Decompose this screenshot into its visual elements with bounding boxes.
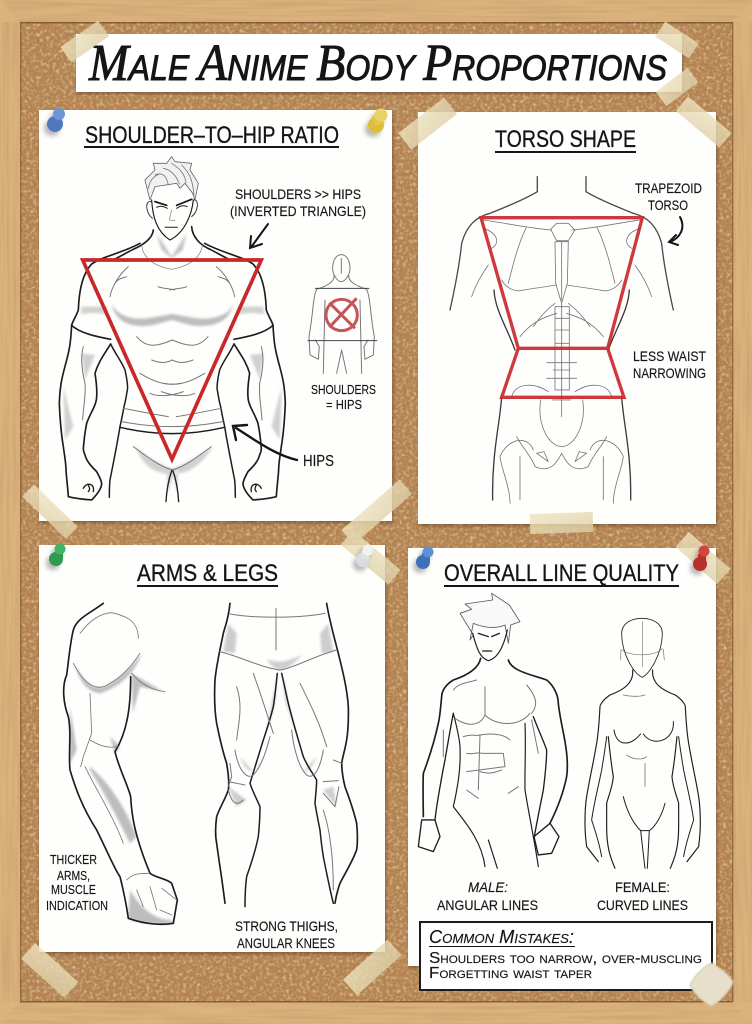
label: shoulders equal hips	[311, 382, 376, 412]
callout: common mistakes: Forgetting waist taper	[429, 965, 592, 982]
figure: small wrong proportion	[308, 255, 377, 373]
label: less waist narrowing: NARROWING	[633, 365, 706, 381]
heading: arms and legs: ARMS & LEGS	[137, 560, 278, 587]
arrow: to shoulders	[250, 224, 268, 248]
label: trapezoid torso: TRAPEZOID	[635, 180, 702, 196]
label: thicker arms: ARMS,	[57, 868, 90, 883]
label: hips: HIPS	[303, 453, 334, 470]
figure: muscular male torso	[59, 243, 285, 502]
callout: shoulders wider than hips	[230, 186, 366, 219]
red inverted triangle	[83, 260, 261, 459]
callout: common mistakes: Shoulders too narrow, over-muscling	[429, 950, 702, 967]
label: female curved lines: CURVED LINES	[597, 897, 688, 913]
label: female curved lines	[597, 879, 688, 913]
callout: shoulders wider than hips: (INVERTED TRIANGLE)	[230, 203, 366, 219]
label: male angular lines	[437, 879, 538, 913]
pin: blue	[47, 108, 65, 132]
label: shoulders equal hips: SHOULDERS	[311, 382, 376, 397]
pin: white	[356, 544, 374, 567]
icon: crossed circle	[326, 298, 357, 331]
callout: shoulders wider than hips: SHOULDERS >> HIPS	[235, 186, 361, 202]
figure: male angular	[418, 593, 567, 868]
label: strong thighs: ANGULAR KNEES	[237, 935, 335, 951]
panel: overall line quality	[408, 548, 716, 990]
panel: arms and legs	[39, 545, 385, 952]
label: male angular lines: MALE:	[468, 879, 508, 895]
heading: overall line quality: OVERALL LINE QUALITY	[444, 560, 679, 587]
label: less waist narrowing: LESS WAIST	[633, 348, 706, 364]
title: MALE ANIME BODY PROPORTIONS	[88, 35, 667, 92]
pin: blue second	[416, 546, 434, 569]
arrow: to hips	[233, 425, 297, 460]
heading: torso shape: TORSO SHAPE	[495, 126, 636, 153]
label: trapezoid torso	[635, 180, 702, 213]
figure: muscular legs	[215, 603, 357, 907]
label: less waist narrowing	[633, 348, 706, 381]
pin: red	[693, 546, 710, 571]
pin: green	[49, 544, 66, 566]
label: thicker arms: THICKER	[50, 852, 97, 867]
figure: muscular male head	[112, 157, 232, 269]
callout: common mistakes	[420, 922, 712, 990]
label: strong thighs: STRONG THIGHS,	[235, 918, 338, 934]
label: shoulders equal hips: = HIPS	[326, 397, 362, 412]
figure: muscular arm	[64, 603, 177, 924]
label: trapezoid torso: TORSO	[648, 197, 688, 213]
figure: female curved	[585, 618, 700, 868]
label: thicker arms: MUSCLE	[51, 882, 96, 897]
label: thicker arms	[46, 852, 108, 913]
figure: torso skeleton	[450, 177, 673, 503]
panel paper: title strip	[76, 34, 682, 92]
panel: shoulder-to-hip ratio	[39, 110, 392, 521]
label: female curved lines: FEMALE:	[615, 879, 670, 895]
red trapezoid overlay	[481, 218, 642, 397]
arrow: to torso edge	[669, 217, 682, 245]
label: thicker arms: INDICATION	[46, 898, 108, 913]
crumpled tape	[690, 963, 733, 1006]
callout: common mistakes: Common Mistakes:	[429, 927, 574, 947]
label: strong thighs	[235, 918, 338, 951]
panel: torso shape	[418, 112, 716, 524]
label: male angular lines: ANGULAR LINES	[437, 897, 538, 913]
pin: yellow	[368, 108, 388, 133]
heading: shoulder-to-hip ratio: SHOULDER–TO–HIP RATIO	[85, 122, 339, 149]
